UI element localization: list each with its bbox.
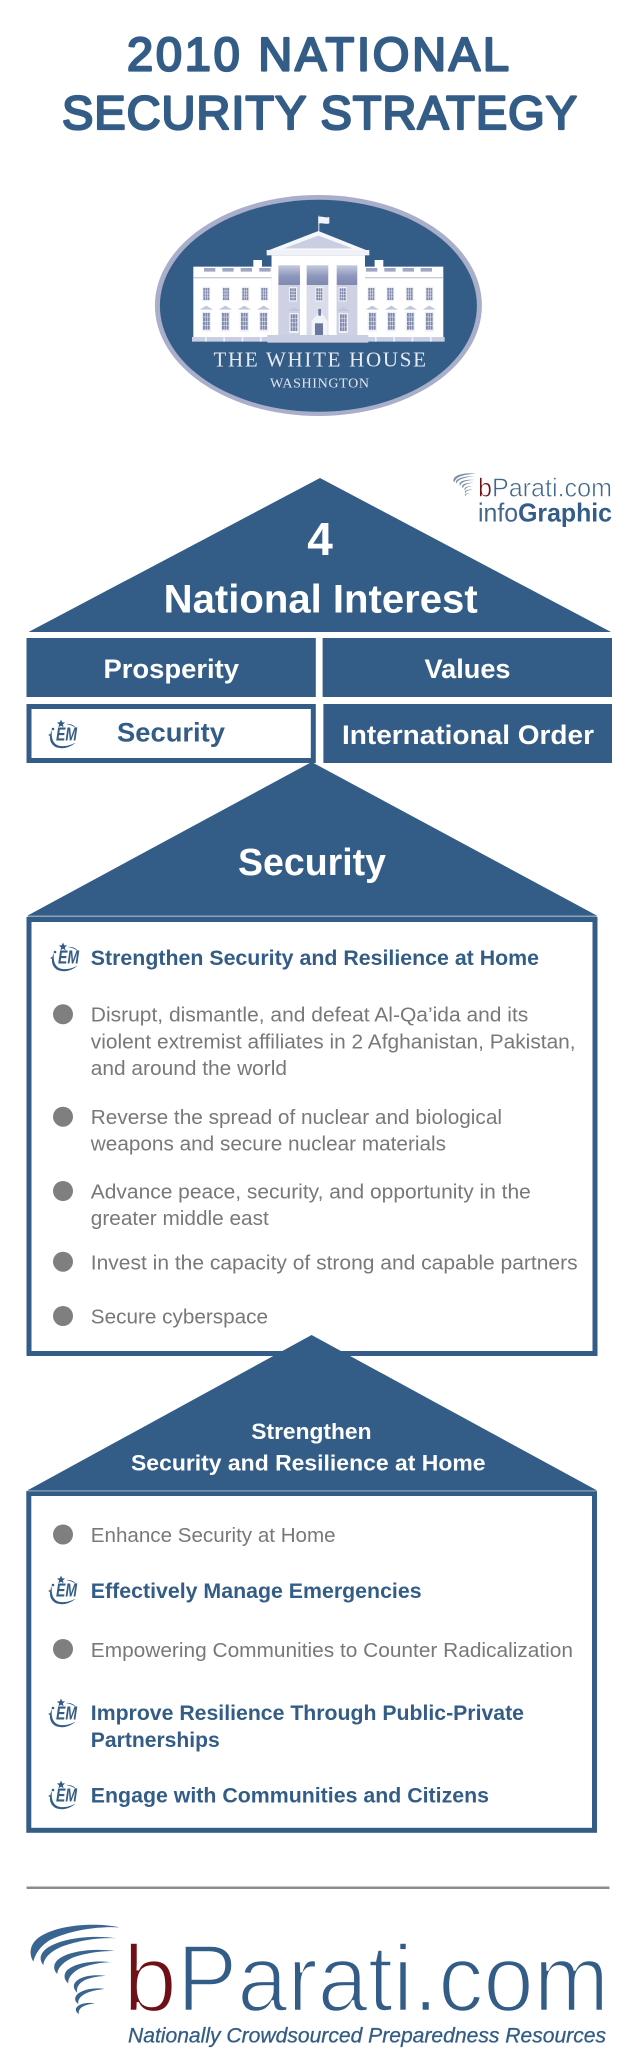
- box: values: Values: [424, 654, 510, 684]
- box: values: [323, 638, 612, 697]
- item: advance: greater middle east: [91, 1208, 269, 1230]
- item: reverse: [53, 1107, 502, 1156]
- icon: tornado: [31, 1925, 119, 2014]
- heading: strengthen: Strengthen: [251, 1419, 372, 1444]
- pyramid roof: [28, 762, 597, 916]
- infographic text: infoGraphic: [478, 498, 612, 528]
- item: disrupt: Disrupt, dismantle, and defeat Al-Qa’ida and its: [91, 1005, 528, 1027]
- item: secure cyberspace: Secure cyberspace: [91, 1306, 268, 1328]
- heading: security: Security: [238, 842, 386, 884]
- box: security highlighted: [29, 706, 313, 760]
- seal: oval: [155, 195, 482, 416]
- seal: washington: WASHINGTON: [270, 376, 369, 392]
- title: [62, 28, 577, 139]
- icon: EM: [49, 720, 77, 748]
- box: prosperity: [26, 638, 316, 697]
- title: 2010 NATIONAL: [127, 28, 509, 80]
- title: SECURITY STRATEGY: [62, 86, 577, 139]
- white house seal: [155, 195, 482, 416]
- item: enhance security: Enhance Security at Home: [91, 1525, 336, 1547]
- number 4: 4: [307, 513, 333, 565]
- item: disrupt: [53, 1004, 576, 1080]
- seal: the white house: THE WHITE HOUSE: [214, 348, 426, 372]
- icon: EM: EM: [56, 724, 77, 744]
- box: international order: International Order: [342, 720, 595, 750]
- item: improve resilience: [49, 1698, 524, 1752]
- item: effectively manage emergencies: EM: [56, 1580, 77, 1600]
- seal: building: [192, 216, 445, 343]
- heading: national interest: National Interest: [164, 578, 478, 622]
- box: security highlighted: Security: [117, 718, 225, 748]
- item: engage with communities: Engage with Communities and Citizens: [91, 1784, 489, 1808]
- item: strengthen security and resilience at home: Strengthen Security and Resilience at Home: [91, 947, 539, 970]
- item: engage with communities: EM: [56, 1784, 77, 1806]
- item: invest: Invest in the capacity of strong and capable partners: [91, 1252, 578, 1274]
- tagline: Nationally Crowdsourced Preparedness Resources: [128, 2024, 606, 2048]
- panel: strengthen security and resilience at home: [28, 1335, 597, 1830]
- item: improve resilience: EM: [56, 1702, 77, 1724]
- item: effectively manage emergencies: [49, 1576, 422, 1604]
- heading: security and resilience at home: Security and Resilience at Home: [131, 1450, 486, 1476]
- item: effectively manage emergencies: Effectively Manage Emergencies: [91, 1580, 422, 1603]
- footer bParati logo: [31, 1925, 609, 2048]
- pyramid roof: [28, 1335, 597, 1490]
- item: reverse: weapons and secure nuclear materials: [90, 1134, 446, 1156]
- pyramid roof: [28, 478, 611, 632]
- box: prosperity: Prosperity: [104, 654, 239, 684]
- item: strengthen security and resilience at home: EM: [58, 946, 79, 968]
- item: improve resilience: Partnerships: [91, 1729, 220, 1752]
- item: reverse: Reverse the spread of nuclear and biological: [91, 1107, 502, 1129]
- item: disrupt: and around the world: [91, 1058, 287, 1080]
- small bParati infoGraphic logo: [453, 472, 612, 528]
- security list box: [29, 920, 595, 1354]
- item: advance: [53, 1181, 531, 1230]
- panel: security: [28, 762, 597, 1354]
- wordmark: parati.com: Parati.com: [177, 1926, 609, 2032]
- icon: small tornado: [453, 473, 476, 496]
- resilience list box: [29, 1494, 595, 1830]
- item: disrupt: violent extremist affiliates in 2 Afghanistan, Pakistan,: [91, 1031, 576, 1053]
- box: international order: [323, 704, 612, 763]
- panel: national interest: [26, 478, 612, 763]
- item: empowering communities: Empowering Communities to Counter Radicalization: [91, 1640, 573, 1662]
- item: advance: Advance peace, security, and opportunity in the: [91, 1181, 531, 1203]
- wordmark: b: b: [123, 1926, 177, 2032]
- small logo text: bParati.com: [478, 472, 612, 502]
- item: improve resilience: Improve Resilience Through Public-Private: [91, 1702, 524, 1725]
